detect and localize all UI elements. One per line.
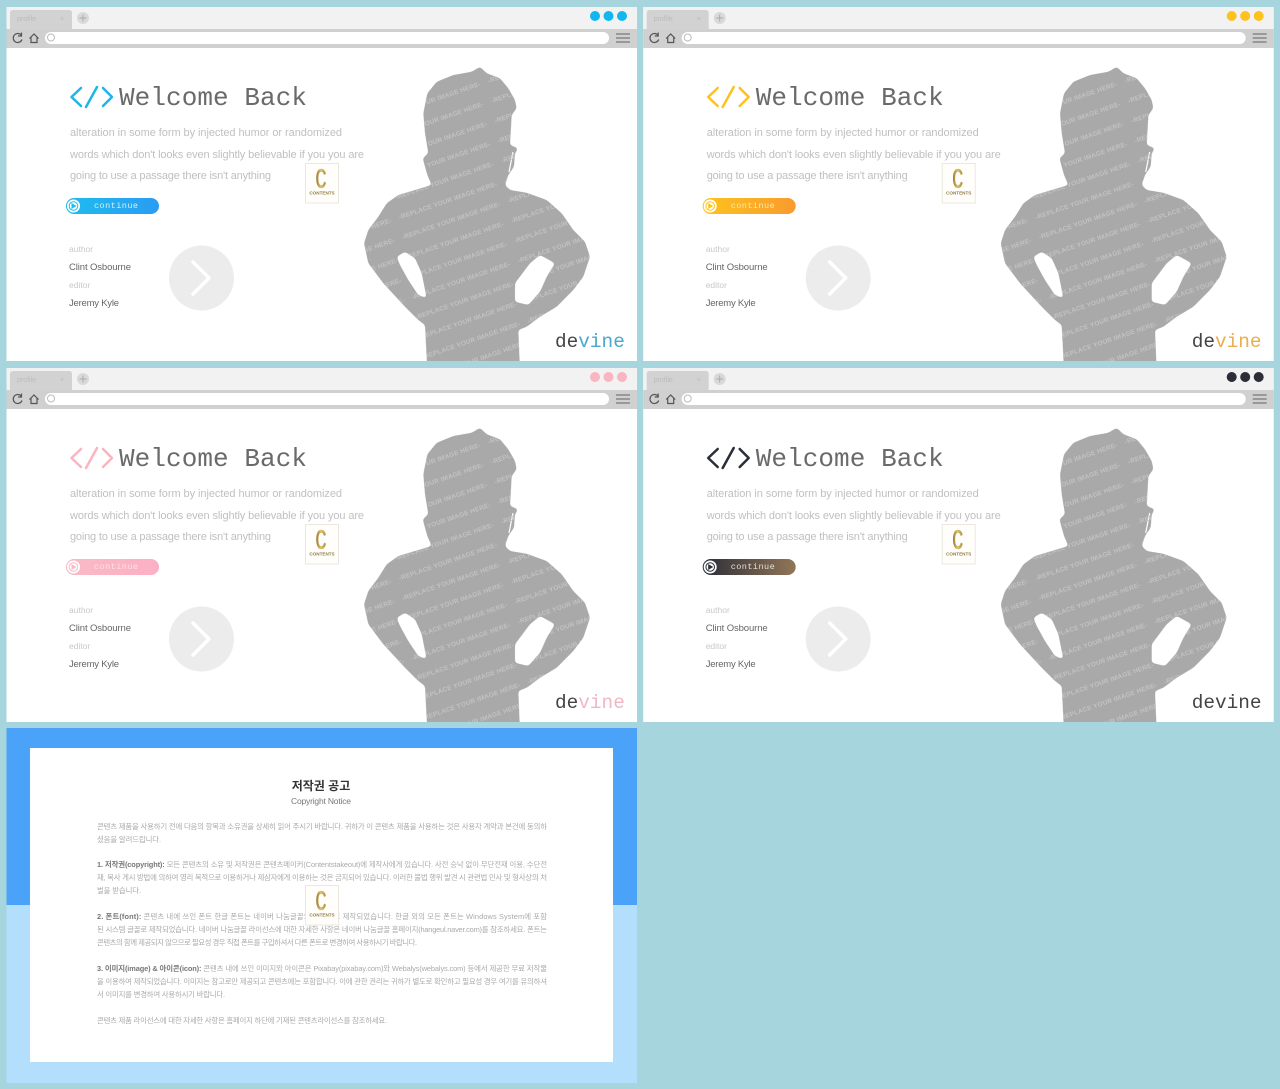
image placeholder silhouette: -REPLACE YOUR IMAGE HERE- -REPLACE YOUR IMAGE HERE- -REPLACE YOUR IMAGE HERE- (929, 145, 1241, 258)
image placeholder silhouette: -REPLACE YOUR IMAGE HERE- -REPLACE YOUR IMAGE HERE- -REPLACE YOUR IMAGE HERE- (286, 105, 597, 218)
credits: Clint Osbourne (69, 262, 131, 273)
contents stamp (942, 524, 975, 564)
image placeholder silhouette: -REPLACE YOUR IMAGE HERE- -REPLACE YOUR IMAGE HERE- -REPLACE YOUR IMAGE HERE- (942, 586, 1254, 699)
copyright intro: 셨음을 알려드립니다. (97, 835, 161, 844)
browser tab bar (643, 7, 1274, 29)
image placeholder silhouette: -REPLACE YOUR IMAGE HERE- -REPLACE YOUR IMAGE HERE- -REPLACE YOUR IMAGE HERE- (929, 506, 1241, 619)
copyright section 2: 2. 폰트(font): 콘텐츠 내에 쓰인 폰트 한글 폰트는 네이버 나눔글꼴의 저작물로 제작되었습니다. 한글 외의 모든 폰트는 Windows System에 포함 (97, 912, 547, 921)
copyright section 1 (97, 860, 547, 895)
image placeholder silhouette: -REPLACE YOUR IMAGE HERE- -REPLACE YOUR IMAGE HERE- -REPLACE YOUR IMAGE HERE- (299, 546, 610, 659)
image placeholder silhouette: -REPLACE YOUR IMAGE HERE- -REPLACE YOUR IMAGE HERE- -REPLACE YOUR IMAGE HERE- (302, 566, 614, 679)
copyright section 3: 서 이미지를 변경하여 사용하시기 바랍니다. (97, 990, 225, 999)
image placeholder silhouette: -REPLACE YOUR IMAGE HERE- -REPLACE YOUR IMAGE HERE- -REPLACE YOUR IMAGE HERE- (292, 145, 604, 258)
browser address bar (6, 29, 637, 48)
credits: Jeremy Kyle (706, 298, 756, 309)
copyright section 2: 콘텐츠의 함께 제공되지 않으므로 필요성 경우 직접 폰트를 구입하셔서 다른 폰트로 변경하여 사용하시기 바랍니다. (97, 938, 417, 947)
credits: editor (69, 641, 90, 651)
credits: author (69, 605, 93, 615)
image placeholder silhouette: -REPLACE YOUR IMAGE HERE- -REPLACE YOUR IMAGE HERE- -REPLACE YOUR IMAGE HERE- (952, 646, 1264, 759)
brand logo: devine (1192, 331, 1262, 353)
contents stamp: C (316, 885, 326, 916)
copyright footer line: 콘텐츠 제품 라이선스에 대한 자세한 사항은 홈페이지 하단에 기재된 콘텐츠라이선스를 참조하세요. (97, 1016, 387, 1025)
image placeholder silhouette: -REPLACE YOUR IMAGE HERE- -REPLACE YOUR IMAGE HERE- -REPLACE YOUR IMAGE HERE- (306, 225, 617, 338)
credits: Jeremy Kyle (706, 659, 756, 670)
contents stamp: CONTENTS (309, 552, 335, 556)
copyright section 3: 3. 이미지(image) & 아이콘(icon): 콘텐츠 내에 쓰인 이미지와 아이콘은 Pixabay(pixabay.com)와 Webalys(webalys.com) 등에서 제공한 무료 저작물 (97, 964, 547, 973)
panel: browser mockup pink (6, 368, 637, 722)
browser address bar (643, 390, 1274, 409)
contents stamp: CONTENTS (309, 912, 335, 918)
icon: next arrow (169, 246, 234, 310)
contents stamp (942, 163, 975, 203)
image placeholder silhouette: -REPLACE YOUR IMAGE HERE- -REPLACE YOUR IMAGE HERE- -REPLACE YOUR IMAGE HERE- (309, 606, 620, 719)
image placeholder silhouette: -REPLACE YOUR IMAGE HERE- -REPLACE YOUR IMAGE HERE- -REPLACE YOUR IMAGE HERE- (273, 25, 584, 138)
image placeholder silhouette: -REPLACE YOUR IMAGE HERE- -REPLACE YOUR IMAGE HERE- -REPLACE YOUR IMAGE HERE- (942, 225, 1254, 338)
image placeholder silhouette: -REPLACE YOUR IMAGE HERE- -REPLACE YOUR IMAGE HERE- -REPLACE YOUR IMAGE HERE- (292, 506, 604, 619)
button: continue (703, 559, 796, 575)
copyright section 3: 을 이용하여 제작되었습니다. 이미지는 참고로만 제공되고 콘텐츠에는 포함합니다. 이에 관한 권리는 귀하가 별도로 확인하고 필요성 경우 여기를 유의하셔 (97, 977, 547, 986)
image placeholder silhouette (1000, 68, 1226, 361)
heading: Welcome Back (119, 444, 307, 474)
browser tab bar: profile (17, 377, 36, 384)
image placeholder silhouette: -REPLACE YOUR IMAGE HERE- -REPLACE YOUR IMAGE HERE- -REPLACE YOUR IMAGE HERE- (916, 65, 1227, 178)
image placeholder silhouette: -REPLACE YOUR IMAGE HERE- -REPLACE YOUR IMAGE HERE- -REPLACE YOUR IMAGE HERE- (315, 285, 627, 398)
brand logo: devine (555, 331, 625, 353)
contents stamp (306, 524, 338, 564)
body text: alteration in some form by injected humor or randomized (707, 127, 979, 139)
body text (69, 488, 364, 543)
button: continue (66, 198, 159, 214)
heading: Welcome Back (756, 83, 944, 113)
image placeholder silhouette: -REPLACE YOUR IMAGE HERE- -REPLACE YOUR IMAGE HERE- -REPLACE YOUR IMAGE HERE- (296, 526, 607, 639)
image placeholder silhouette: -REPLACE YOUR IMAGE HERE- -REPLACE YOUR IMAGE HERE- -REPLACE YOUR IMAGE HERE- (939, 566, 1250, 679)
image placeholder silhouette: -REPLACE YOUR IMAGE HERE- -REPLACE YOUR IMAGE HERE- -REPLACE YOUR IMAGE HERE- (952, 285, 1264, 398)
credits: author (706, 605, 730, 615)
credits: editor (706, 280, 727, 290)
heading: Welcome Back (119, 83, 307, 113)
panel: browser mockup blue (6, 7, 637, 361)
image placeholder silhouette: -REPLACE YOUR IMAGE HERE- -REPLACE YOUR IMAGE HERE- -REPLACE YOUR IMAGE HERE- (282, 446, 594, 559)
image placeholder silhouette: -REPLACE YOUR IMAGE HERE- -REPLACE YOUR IMAGE HERE- -REPLACE YOUR IMAGE HERE- (279, 65, 591, 178)
image placeholder silhouette: -REPLACE YOUR IMAGE HERE- -REPLACE YOUR IMAGE HERE- -REPLACE YOUR IMAGE HERE- (932, 165, 1244, 278)
credits: author (706, 244, 730, 254)
copyright section 1: 1. 저작권(copyright): 모든 콘텐츠의 소유 및 저작권은 콘텐츠메이커(Contentstakeout)에 제작사에게 있습니다. 사전 승낙 없이 무단전재 이용, 수단전 (97, 860, 547, 869)
browser address bar (643, 29, 1274, 48)
image placeholder silhouette: -REPLACE YOUR IMAGE HERE- -REPLACE YOUR IMAGE HERE- -REPLACE YOUR IMAGE HERE- (926, 125, 1237, 238)
image placeholder silhouette: -REPLACE YOUR IMAGE HERE- -REPLACE YOUR IMAGE HERE- -REPLACE YOUR IMAGE HERE- (955, 666, 1267, 779)
copyright section 2 (97, 912, 547, 947)
browser tab bar (6, 7, 637, 29)
body text (69, 127, 364, 182)
icon: code brackets (72, 87, 112, 107)
image placeholder silhouette: -REPLACE YOUR IMAGE HERE- -REPLACE YOUR IMAGE HERE- -REPLACE YOUR IMAGE HERE- (909, 386, 1221, 499)
image placeholder silhouette: -REPLACE YOUR IMAGE HERE- -REPLACE YOUR IMAGE HERE- -REPLACE YOUR IMAGE HERE- (279, 426, 591, 539)
body text: words which don't looks even slightly believable if you you are (706, 149, 1001, 161)
body text: alteration in some form by injected humor or randomized (707, 488, 979, 500)
copyright section 3 (97, 964, 547, 999)
contents stamp: C (952, 163, 963, 194)
body text: alteration in some form by injected humor or randomized (70, 127, 342, 139)
contents stamp: C (952, 524, 963, 555)
image placeholder silhouette: -REPLACE YOUR IMAGE HERE- -REPLACE YOUR IMAGE HERE- -REPLACE YOUR IMAGE HERE- (306, 586, 617, 699)
body text: going to use a passage there isn't anything (70, 170, 271, 182)
browser tab bar (6, 368, 637, 390)
contents stamp: CONTENTS (946, 190, 971, 196)
button: continue (703, 198, 796, 214)
image placeholder silhouette: -REPLACE YOUR IMAGE HERE- -REPLACE YOUR IMAGE HERE- -REPLACE YOUR IMAGE HERE- (319, 666, 630, 779)
body text: alteration in some form by injected humor or randomized (70, 488, 342, 500)
image placeholder silhouette (1000, 428, 1226, 722)
body text: words which don't looks even slightly believable if you you are (69, 510, 364, 522)
contents stamp (306, 885, 338, 925)
image placeholder silhouette: -REPLACE YOUR IMAGE HERE- -REPLACE YOUR IMAGE HERE- -REPLACE YOUR IMAGE HERE- (276, 406, 587, 519)
copyright section 1: 재, 복사 게시 방법에 의하여 영리 목적으로 이용하거나 제삼자에게 이용하는 것은 금지되어 있습니다. 이러한 불법 행위 발견 시 관련법 민사 및 형사상의 처 (97, 873, 547, 882)
contents stamp (306, 163, 338, 203)
image placeholder silhouette (364, 428, 590, 722)
copyright intro: 콘텐츠 제품을 사용하기 전에 다음의 항목과 소유권을 상세히 읽어 주시기 바랍니다. 귀하가 이 콘텐츠 제품을 사용하는 것은 사용자 계약과 본건에 동의하 (97, 822, 547, 831)
credits: Clint Osbourne (69, 623, 131, 634)
image placeholder silhouette: -REPLACE YOUR IMAGE HERE- -REPLACE YOUR IMAGE HERE- -REPLACE YOUR IMAGE HERE- (296, 165, 607, 278)
icon: code brackets (708, 448, 749, 468)
browser tab bar (643, 368, 1274, 390)
icon: next arrow (169, 606, 234, 672)
image placeholder silhouette: -REPLACE YOUR IMAGE HERE- -REPLACE YOUR IMAGE HERE- -REPLACE YOUR IMAGE HERE- (273, 386, 584, 499)
image placeholder silhouette: -REPLACE YOUR IMAGE HERE- -REPLACE YOUR IMAGE HERE- -REPLACE YOUR IMAGE HERE- (936, 185, 1247, 298)
image placeholder silhouette: -REPLACE YOUR IMAGE HERE- -REPLACE YOUR IMAGE HERE- -REPLACE YOUR IMAGE HERE- (319, 305, 630, 418)
icon: code brackets (708, 87, 749, 107)
image placeholder silhouette: -REPLACE YOUR IMAGE HERE- -REPLACE YOUR IMAGE HERE- -REPLACE YOUR IMAGE HERE- (936, 546, 1247, 659)
brand logo: devine (555, 692, 625, 714)
body text (706, 127, 1001, 182)
browser tab bar: profile (17, 16, 36, 23)
browser tab bar: × (60, 377, 64, 384)
credits: Jeremy Kyle (69, 298, 119, 309)
body text (706, 488, 1001, 543)
contents stamp: C (316, 524, 326, 555)
credits (69, 244, 131, 309)
credits (706, 244, 768, 309)
image placeholder silhouette: -REPLACE YOUR IMAGE HERE- -REPLACE YOUR IMAGE HERE- -REPLACE YOUR IMAGE HERE- (309, 245, 620, 358)
copyright intro (97, 822, 547, 844)
credits: Clint Osbourne (706, 623, 768, 634)
browser tab bar: × (60, 16, 64, 23)
contents stamp: C (316, 163, 326, 194)
icon: next arrow (806, 246, 871, 310)
image placeholder silhouette: -REPLACE YOUR IMAGE HERE- -REPLACE YOUR IMAGE HERE- -REPLACE YOUR IMAGE HERE- (286, 466, 597, 579)
panel: copyright notice (6, 728, 637, 1083)
browser tab bar: profile (654, 377, 673, 384)
credits (69, 605, 131, 670)
copyright title: 저작권 공고 (292, 778, 350, 793)
copyright section 1: 벌을 받습니다. (97, 886, 141, 895)
credits (706, 605, 768, 670)
image placeholder silhouette: -REPLACE YOUR IMAGE HERE- -REPLACE YOUR IMAGE HERE- -REPLACE YOUR IMAGE HERE- (312, 265, 624, 378)
image placeholder silhouette (364, 68, 590, 361)
image placeholder silhouette: -REPLACE YOUR IMAGE HERE- -REPLACE YOUR IMAGE HERE- -REPLACE YOUR IMAGE HERE- (909, 25, 1221, 138)
browser tab bar: profile (654, 16, 673, 23)
image placeholder silhouette: -REPLACE YOUR IMAGE HERE- -REPLACE YOUR IMAGE HERE- -REPLACE YOUR IMAGE HERE- (946, 245, 1257, 358)
copyright subtitle: Copyright Notice (291, 796, 351, 806)
image placeholder silhouette: -REPLACE YOUR IMAGE HERE- -REPLACE YOUR IMAGE HERE- -REPLACE YOUR IMAGE HERE- (932, 526, 1244, 639)
credits: editor (69, 280, 90, 290)
image placeholder silhouette: -REPLACE YOUR IMAGE HERE- -REPLACE YOUR IMAGE HERE- -REPLACE YOUR IMAGE HERE- (919, 85, 1231, 198)
button: continue (66, 559, 159, 575)
image placeholder silhouette: -REPLACE YOUR IMAGE HERE- -REPLACE YOUR IMAGE HERE- -REPLACE YOUR IMAGE HERE- (913, 406, 1224, 519)
body text: going to use a passage there isn't anything (707, 531, 908, 543)
icon: next arrow (806, 606, 871, 672)
panel: browser mockup yellow (643, 7, 1274, 361)
image placeholder silhouette: -REPLACE YOUR IMAGE HERE- -REPLACE YOUR IMAGE HERE- -REPLACE YOUR IMAGE HERE- (949, 265, 1260, 378)
brand logo: devine (1192, 692, 1262, 714)
button: continue: continue (94, 201, 138, 211)
image placeholder silhouette: -REPLACE YOUR IMAGE HERE- -REPLACE YOUR IMAGE HERE- -REPLACE YOUR IMAGE HERE- (282, 85, 594, 198)
button: continue: continue (94, 562, 138, 572)
body text: going to use a passage there isn't anything (707, 170, 908, 182)
panel: browser mockup dark (643, 368, 1274, 722)
image placeholder silhouette: -REPLACE YOUR IMAGE HERE- -REPLACE YOUR IMAGE HERE- -REPLACE YOUR IMAGE HERE- (919, 446, 1231, 559)
credits: Jeremy Kyle (69, 659, 119, 670)
image placeholder silhouette: -REPLACE YOUR IMAGE HERE- -REPLACE YOUR IMAGE HERE- -REPLACE YOUR IMAGE HERE- (922, 466, 1234, 579)
body text: going to use a passage there isn't anything (70, 531, 271, 543)
button: continue: continue (731, 562, 775, 572)
browser tab bar: × (697, 16, 701, 23)
image placeholder silhouette: -REPLACE YOUR IMAGE HERE- -REPLACE YOUR IMAGE HERE- -REPLACE YOUR IMAGE HERE- (302, 205, 614, 318)
icon: code brackets (72, 448, 112, 468)
image placeholder silhouette: -REPLACE YOUR IMAGE HERE- -REPLACE YOUR IMAGE HERE- -REPLACE YOUR IMAGE HERE- (916, 426, 1227, 539)
contents stamp: CONTENTS (309, 190, 335, 196)
image placeholder silhouette: -REPLACE YOUR IMAGE HERE- -REPLACE YOUR IMAGE HERE- -REPLACE YOUR IMAGE HERE- (315, 646, 627, 759)
image placeholder silhouette: -REPLACE YOUR IMAGE HERE- -REPLACE YOUR IMAGE HERE- -REPLACE YOUR IMAGE HERE- (299, 185, 610, 298)
credits: Clint Osbourne (706, 262, 768, 273)
image placeholder silhouette: -REPLACE YOUR IMAGE HERE- -REPLACE YOUR IMAGE HERE- -REPLACE YOUR IMAGE HERE- (913, 45, 1224, 158)
image placeholder silhouette: -REPLACE YOUR IMAGE HERE- -REPLACE YOUR IMAGE HERE- -REPLACE YOUR IMAGE HERE- (946, 606, 1257, 719)
image placeholder silhouette: -REPLACE YOUR IMAGE HERE- -REPLACE YOUR IMAGE HERE- -REPLACE YOUR IMAGE HERE- (276, 45, 587, 158)
credits: editor (706, 641, 727, 651)
body text: words which don't looks even slightly believable if you you are (706, 510, 1001, 522)
heading: Welcome Back (756, 444, 944, 474)
image placeholder silhouette: -REPLACE YOUR IMAGE HERE- -REPLACE YOUR IMAGE HERE- -REPLACE YOUR IMAGE HERE- (926, 486, 1237, 599)
credits: author (69, 244, 93, 254)
image placeholder silhouette: -REPLACE YOUR IMAGE HERE- -REPLACE YOUR IMAGE HERE- -REPLACE YOUR IMAGE HERE- (312, 626, 624, 739)
copyright section 2: 된 시스템 글꼴로 제작되었습니다. 네이버 나눔글꼴 라이선스에 대한 자세한 사항은 네이버 나눔글꼴 홈페이지(hangeul.naver.com)를 참조하세요. 폰트는 (97, 925, 547, 934)
image placeholder silhouette: -REPLACE YOUR IMAGE HERE- -REPLACE YOUR IMAGE HERE- -REPLACE YOUR IMAGE HERE- (955, 305, 1267, 418)
image placeholder silhouette: -REPLACE YOUR IMAGE HERE- -REPLACE YOUR IMAGE HERE- -REPLACE YOUR IMAGE HERE- (939, 205, 1250, 318)
contents stamp: CONTENTS (946, 552, 971, 556)
image placeholder silhouette: -REPLACE YOUR IMAGE HERE- -REPLACE YOUR IMAGE HERE- -REPLACE YOUR IMAGE HERE- (289, 125, 601, 238)
body text: words which don't looks even slightly believable if you you are (69, 149, 364, 161)
button: continue: continue (731, 201, 775, 211)
browser address bar (6, 390, 637, 409)
image placeholder silhouette: -REPLACE YOUR IMAGE HERE- -REPLACE YOUR IMAGE HERE- -REPLACE YOUR IMAGE HERE- (949, 626, 1260, 739)
image placeholder silhouette: -REPLACE YOUR IMAGE HERE- -REPLACE YOUR IMAGE HERE- -REPLACE YOUR IMAGE HERE- (289, 486, 601, 599)
browser tab bar: × (697, 377, 701, 384)
image placeholder silhouette: -REPLACE YOUR IMAGE HERE- -REPLACE YOUR IMAGE HERE- -REPLACE YOUR IMAGE HERE- (922, 105, 1234, 218)
